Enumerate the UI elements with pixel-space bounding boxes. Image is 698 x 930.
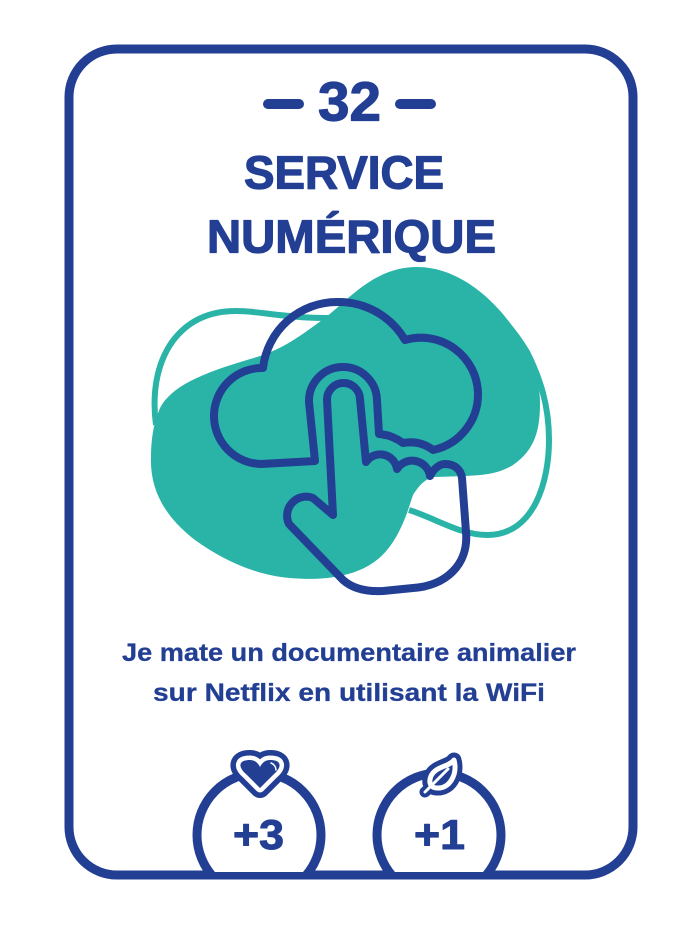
title: SERVICE (244, 146, 444, 198)
cloud outline (214, 302, 478, 464)
card number: 32 (318, 70, 381, 132)
icon: leaf (425, 760, 455, 792)
badge: environment score (377, 760, 501, 897)
description text (122, 639, 576, 707)
icon: heart (240, 760, 280, 788)
description text: Je mate un documentaire animalier (122, 639, 576, 667)
hand outline (287, 383, 466, 591)
teal filled blob (151, 267, 540, 579)
illustration: cloud and pointing hand (151, 267, 549, 591)
card number (263, 70, 436, 132)
description text: sur Netflix en utilisant la WiFi (153, 679, 545, 707)
badge: well-being score (197, 760, 321, 897)
title: NUMÉRIQUE (207, 210, 496, 262)
teal outline blob (155, 278, 549, 535)
card frame (69, 49, 633, 875)
badge: well-being score: +3 (233, 811, 284, 858)
title (207, 146, 496, 262)
badge: environment score: +1 (414, 811, 465, 858)
